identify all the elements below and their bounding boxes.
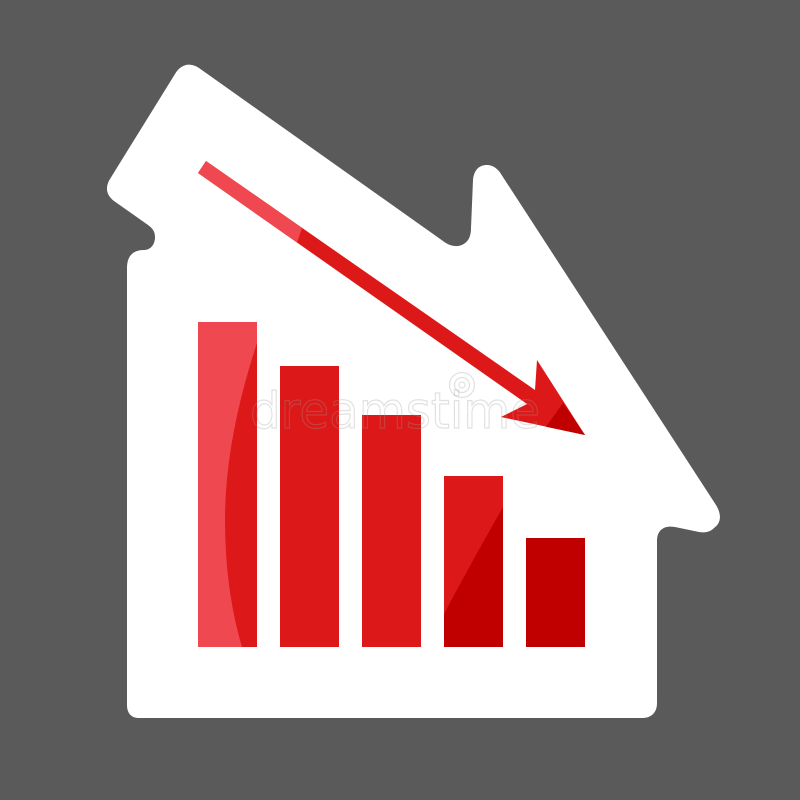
watermark (250, 372, 540, 440)
bar 3 (362, 415, 421, 647)
downward arrow (198, 161, 585, 435)
arrow dark tip (546, 403, 585, 435)
bar 4 (444, 476, 503, 647)
bar 2 (280, 366, 339, 647)
watermark text: dreamstime (250, 382, 540, 440)
bar 5 (526, 538, 585, 647)
arrow shaft and head (198, 161, 585, 435)
bar 1 (198, 322, 257, 647)
bar chart (198, 322, 585, 647)
watermark spiral logo (450, 372, 474, 398)
house silhouette (107, 65, 720, 718)
arrow light tail (198, 161, 302, 242)
